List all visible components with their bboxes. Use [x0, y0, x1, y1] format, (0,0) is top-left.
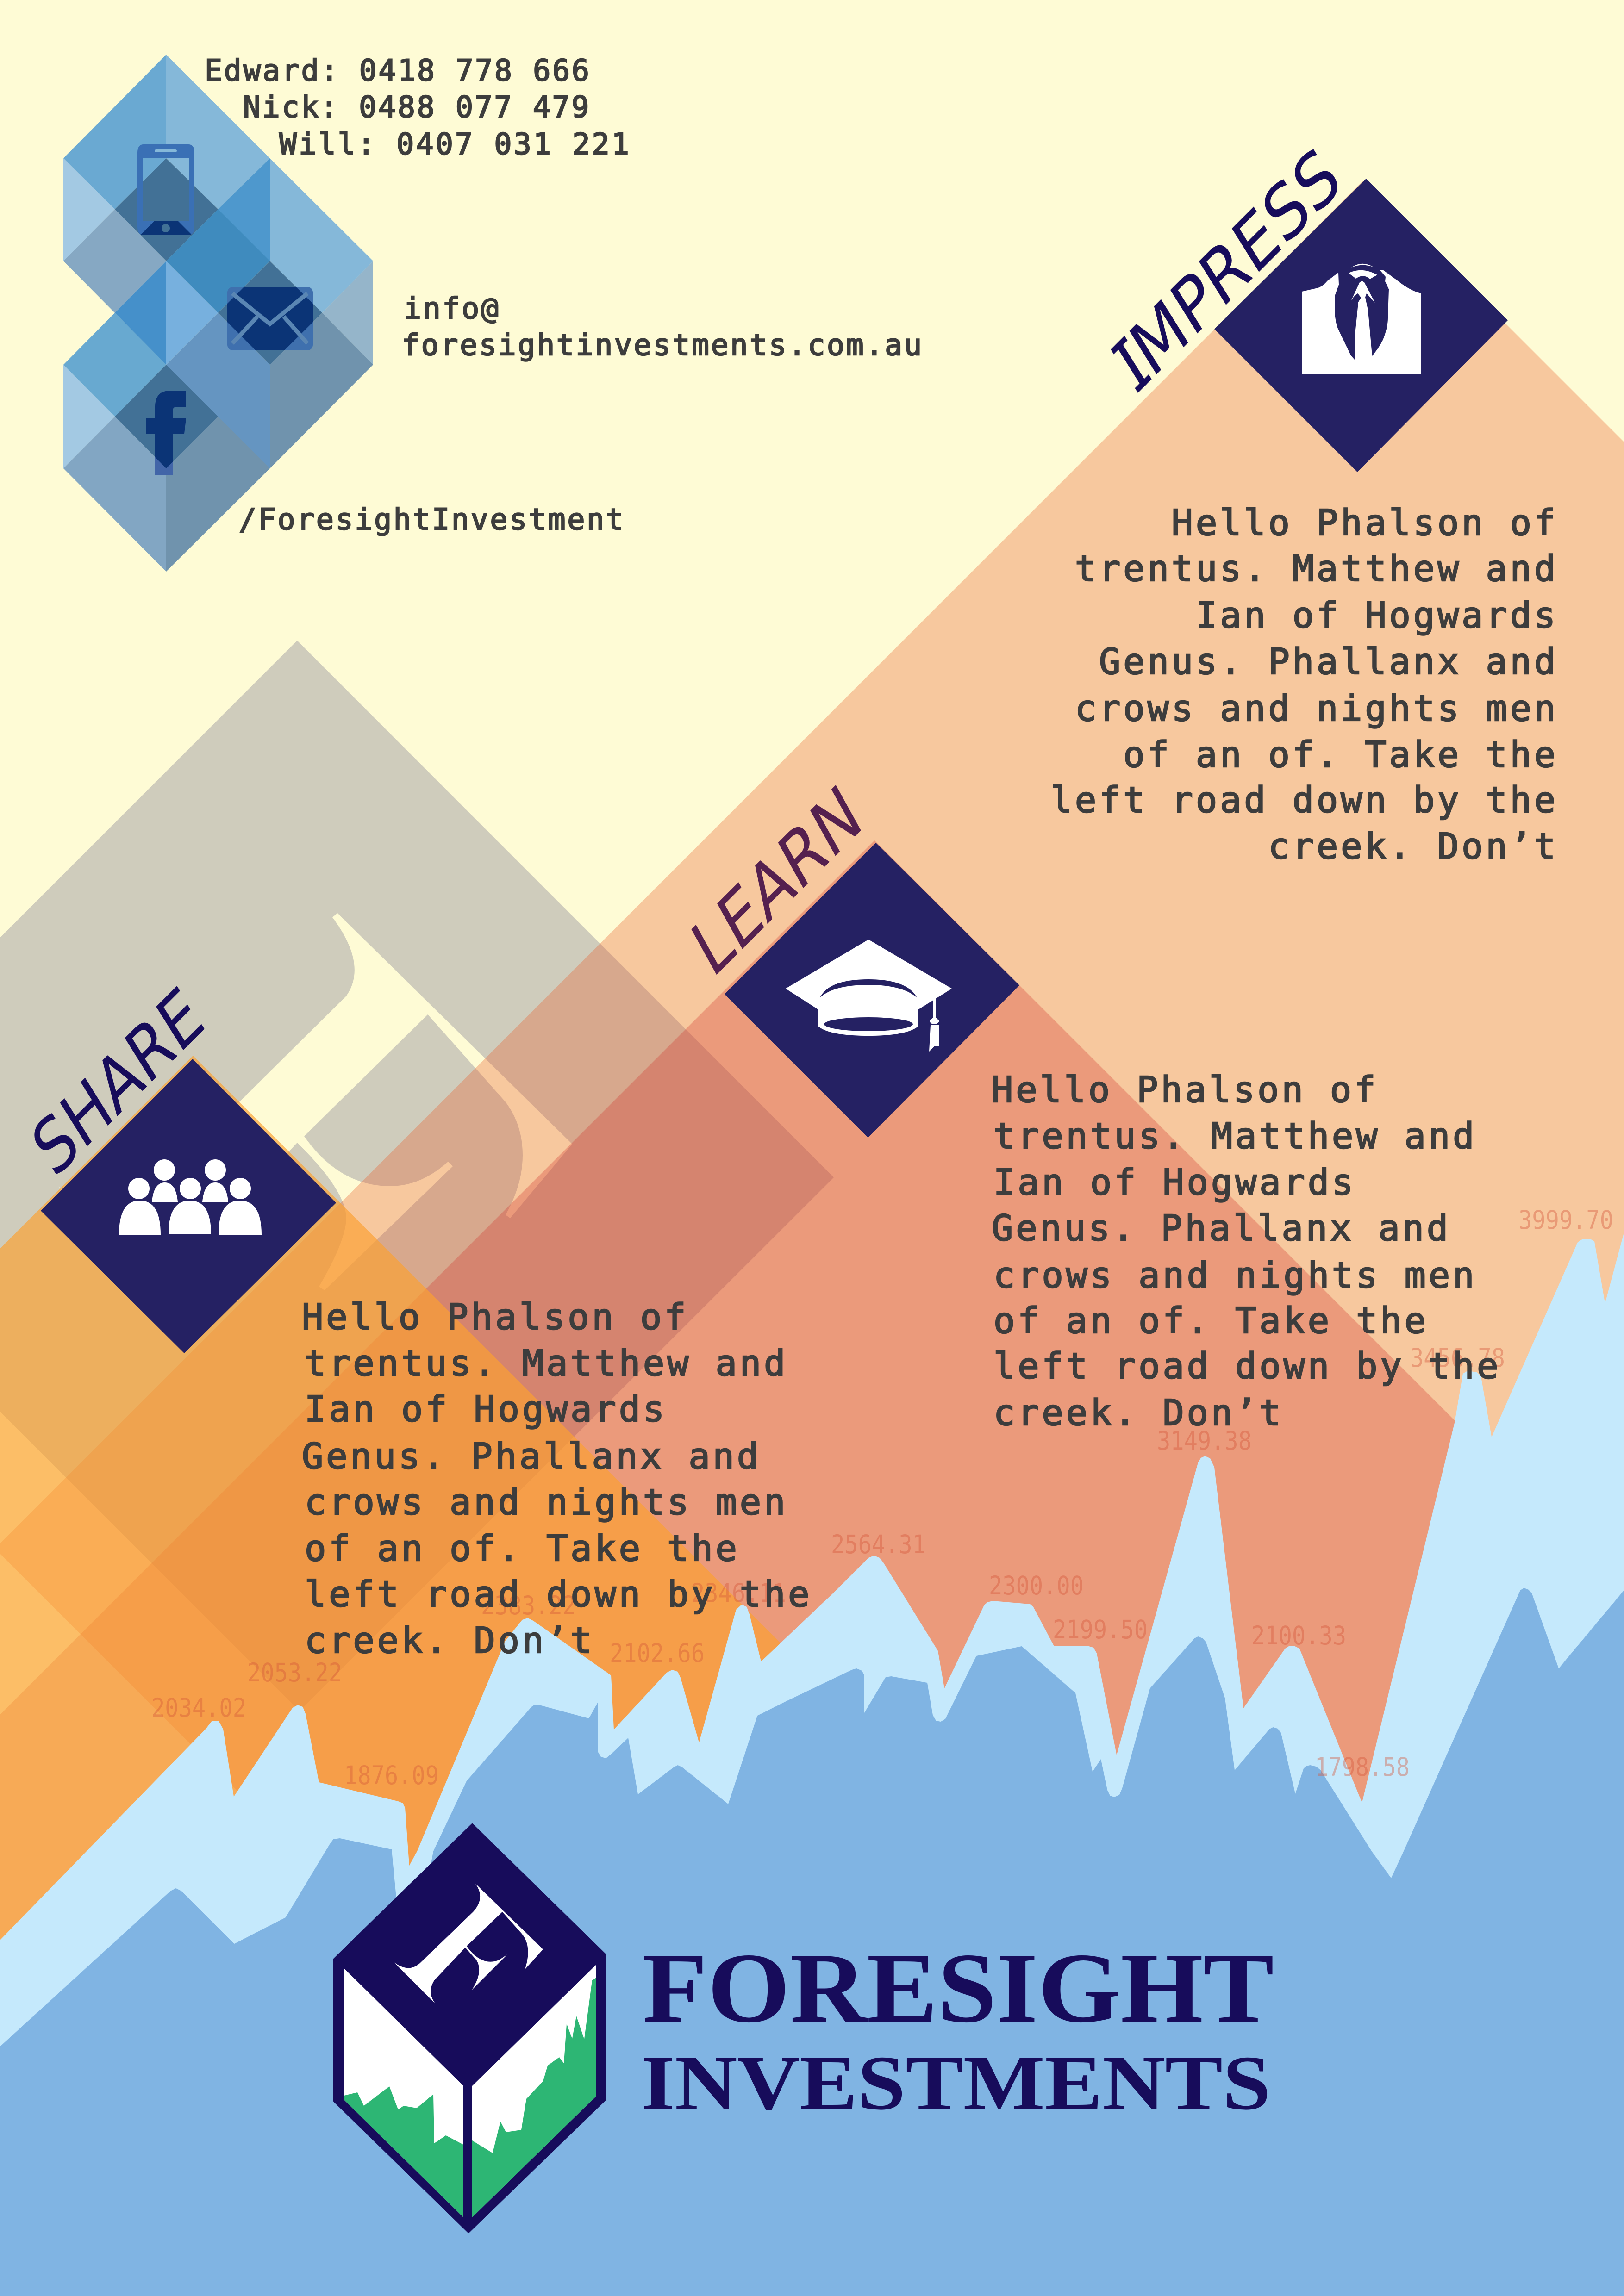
share heading: SHARE — [20, 971, 216, 1194]
contact email: foresightinvestments.com.au — [402, 328, 924, 362]
logo letter F — [394, 1883, 543, 2004]
share body text: left road down by the — [305, 1574, 812, 1615]
impress heading: IMPRESS — [1104, 131, 1354, 407]
learn heading: LEARN — [680, 768, 874, 994]
salmon diamond background — [0, 840, 1624, 2296]
learn body text: Genus. Phallanx and — [992, 1208, 1451, 1249]
impress body text: Ian of Hogwards — [1196, 595, 1558, 636]
value label: 2383.22: 2383.22 — [481, 1591, 576, 1620]
learn body text: of an of. Take the — [993, 1300, 1429, 1342]
learn body text: Ian of Hogwards — [993, 1162, 1356, 1203]
value label: 1876.09: 1876.09 — [344, 1761, 439, 1790]
value label: 3999.70: 3999.70 — [1518, 1205, 1613, 1235]
learn body text — [992, 1070, 1501, 1434]
contact facebook handle: /ForesightInvestment — [239, 503, 625, 536]
contact phone numbers — [205, 54, 631, 161]
impress body text: trentus. Matthew and — [1075, 548, 1558, 590]
icon: envelope — [227, 287, 313, 350]
icon: group of people — [119, 1159, 262, 1235]
learn body text: creek. Don’t — [993, 1393, 1283, 1434]
value label: 2100.33: 2100.33 — [1251, 1621, 1346, 1650]
share navy diamond — [41, 1059, 336, 1353]
logo right green chart — [472, 1978, 596, 2217]
logo navy hexagon — [334, 1824, 605, 2232]
contact email — [402, 292, 924, 362]
icon: smartphone — [137, 144, 194, 235]
share body text: crows and nights men — [305, 1482, 788, 1523]
impress body text: of an of. Take the — [1123, 734, 1558, 776]
brand line: investments: INVESTMENTS — [641, 2040, 1271, 2126]
icon: graduation cap — [786, 940, 952, 1052]
learn body text: left road down by the — [993, 1346, 1501, 1387]
grey diamond with cut-out letter F watermark — [0, 641, 834, 1711]
share body text: Genus. Phallanx and — [302, 1436, 761, 1477]
brand name — [641, 1933, 1274, 2126]
share body text: creek. Don’t — [305, 1620, 594, 1661]
value label: 2102.66: 2102.66 — [610, 1638, 705, 1668]
orange diamond background — [0, 1056, 1434, 2296]
learn body text: Hello Phalson of — [992, 1070, 1378, 1111]
learn body text: trentus. Matthew and — [993, 1116, 1477, 1157]
share body text: trentus. Matthew and — [305, 1343, 788, 1384]
panel: learn — [680, 768, 1501, 1434]
impress navy diamond — [1214, 179, 1508, 472]
logo: foresight cube — [334, 1824, 605, 2232]
share body text — [302, 1297, 812, 1661]
icon: suit and tie — [1302, 264, 1421, 374]
light blue chart area — [0, 1232, 1624, 2296]
value label: 2346.11: 2346.11 — [691, 1578, 786, 1608]
impress body text — [1051, 503, 1558, 867]
value label: 3149.38: 3149.38 — [1157, 1426, 1252, 1456]
contact email: info@ — [404, 292, 500, 325]
value label: 2034.02: 2034.02 — [151, 1693, 246, 1723]
share body text: of an of. Take the — [305, 1528, 740, 1569]
brand line: foresight: FORESIGHT — [643, 1933, 1274, 2043]
share body text: Ian of Hogwards — [305, 1389, 667, 1430]
logo left green chart — [344, 2086, 463, 2217]
panel: impress — [1051, 131, 1558, 867]
icon: facebook f — [146, 391, 186, 475]
logo left face — [344, 1968, 463, 2217]
contact phone numbers: Edward: 0418 778 666 — [205, 54, 591, 87]
value label: 2053.22: 2053.22 — [247, 1658, 342, 1687]
impress body text: creek. Don’t — [1268, 826, 1558, 867]
value label: 2564.31: 2564.31 — [831, 1530, 926, 1559]
stock chart: value labels and area layers — [0, 1205, 1624, 2296]
impress body text: left road down by the — [1051, 780, 1558, 821]
contact icon: stacked blue diamonds — [63, 55, 373, 572]
share body text: Hello Phalson of — [302, 1297, 688, 1338]
contact phone numbers: Will: 0407 031 221 — [279, 127, 631, 161]
impress body text: Hello Phalson of — [1172, 503, 1558, 544]
value label: 1798.58: 1798.58 — [1315, 1752, 1410, 1782]
learn body text: crows and nights men — [993, 1255, 1477, 1296]
value label: 2300.00: 2300.00 — [989, 1571, 1084, 1600]
mid blue chart area — [0, 1588, 1624, 2296]
value label: 2199.50: 2199.50 — [1053, 1615, 1148, 1644]
panel: share — [20, 971, 812, 1661]
impress body text: Genus. Phallanx and — [1099, 641, 1558, 683]
logo right face — [472, 1965, 596, 2217]
contact phone numbers: Nick: 0488 077 479 — [243, 90, 591, 124]
impress body text: crows and nights men — [1075, 688, 1558, 729]
value label: 3456.78: 3456.78 — [1410, 1343, 1505, 1373]
learn navy diamond — [725, 843, 1019, 1138]
